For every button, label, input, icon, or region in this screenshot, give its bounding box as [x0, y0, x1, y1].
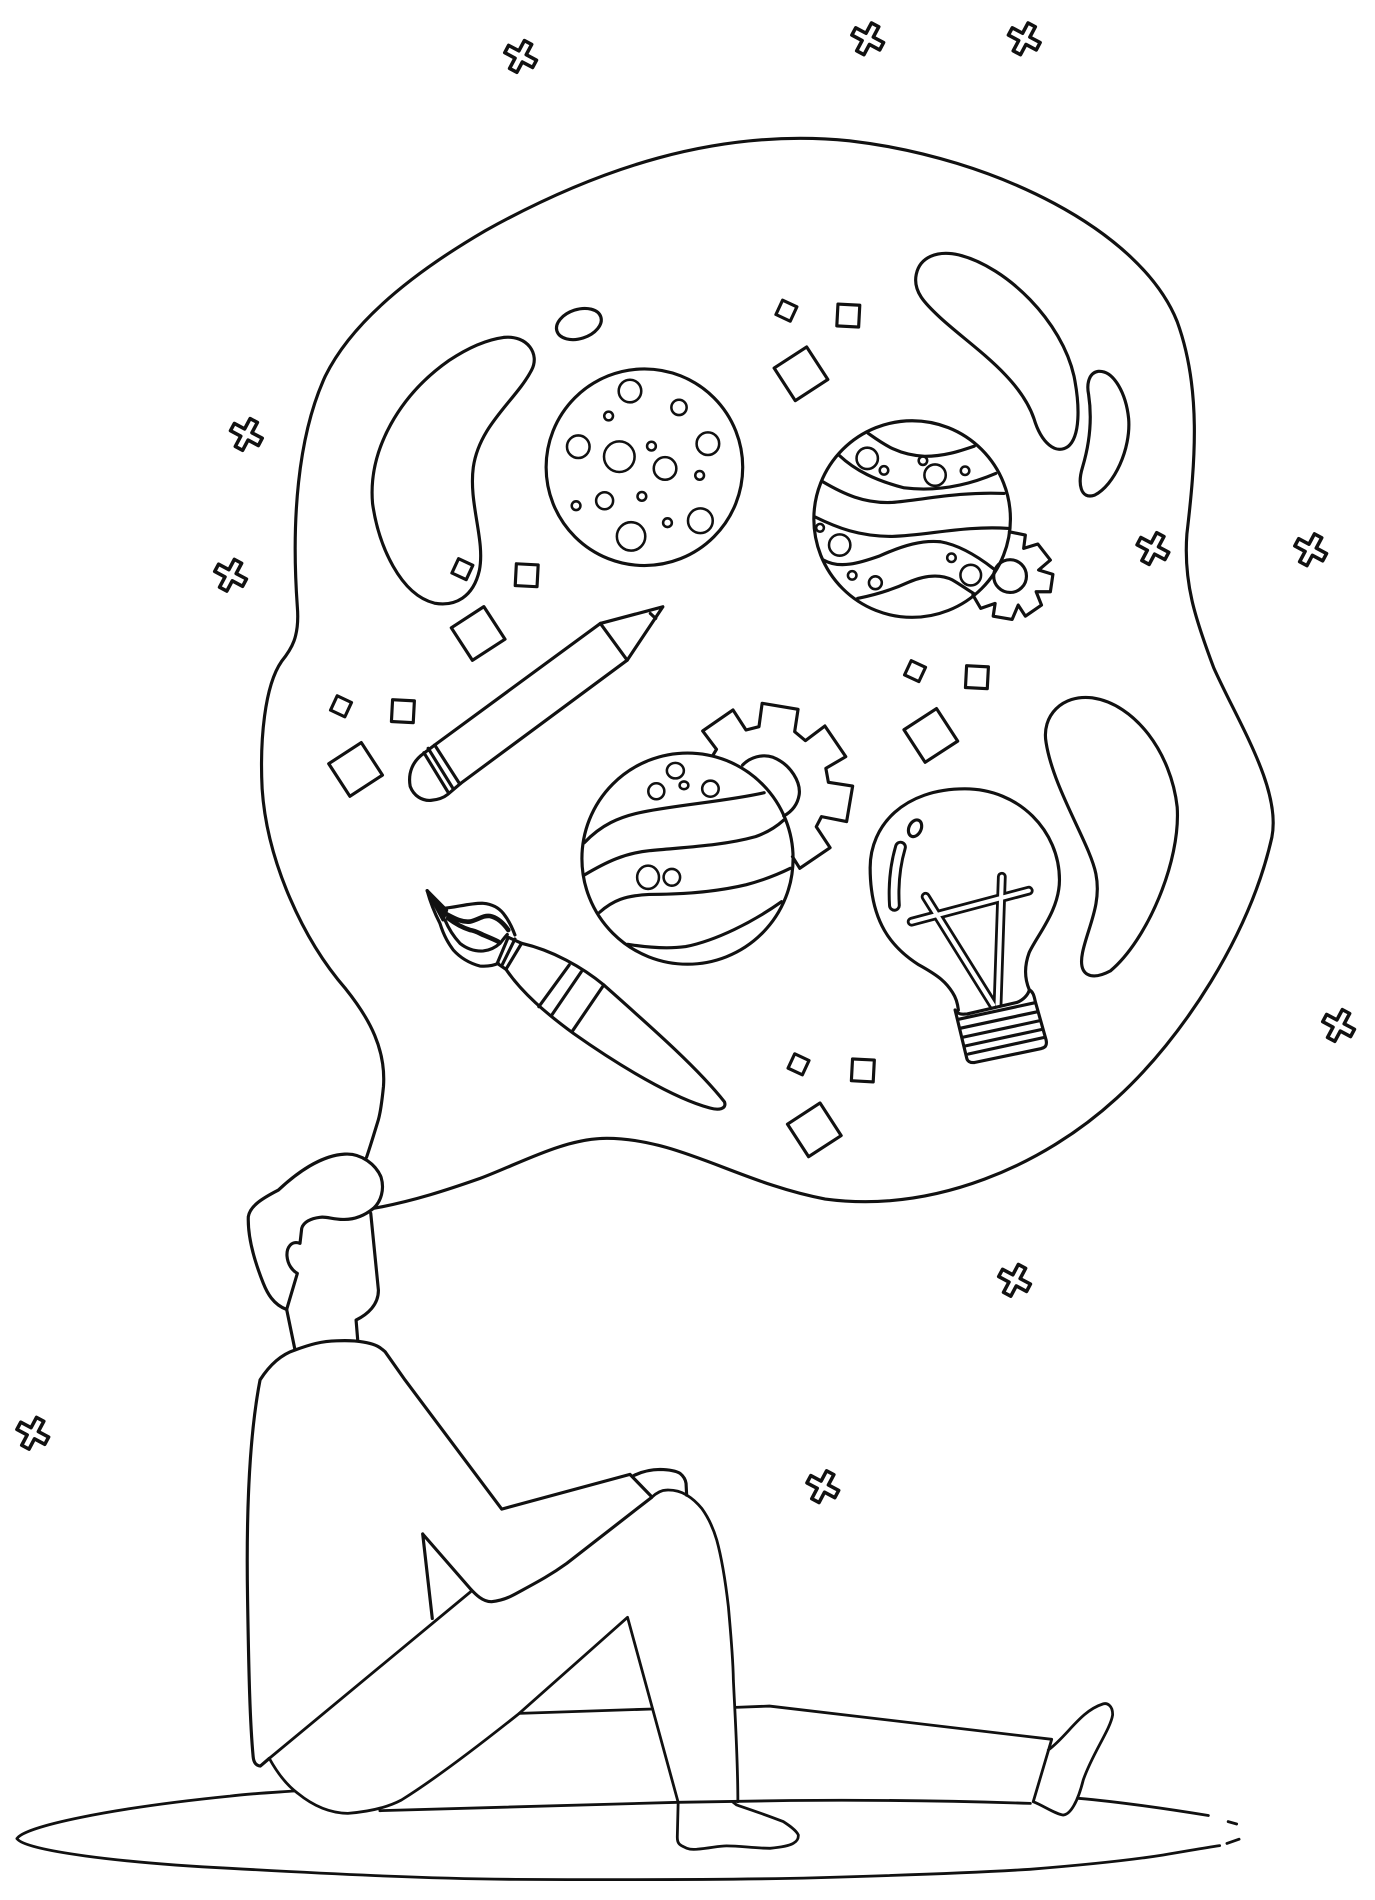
small floating squares — [329, 300, 988, 1157]
hair — [248, 1154, 382, 1309]
thought bubble — [262, 138, 1273, 1208]
icon: light bulb — [870, 789, 1059, 1063]
torso and arm — [247, 1341, 687, 1766]
face and neck — [287, 1213, 378, 1350]
ground ellipse — [17, 1791, 1239, 1880]
decorative blobs inside the bubble — [372, 253, 1177, 976]
icon: paint brush — [427, 891, 725, 1109]
icon: striped planet upper right — [814, 421, 1010, 617]
front leg — [269, 1617, 798, 1849]
front leg upper edge and shin — [269, 1490, 738, 1802]
icon: cratered moon — [546, 369, 743, 566]
back leg and foot — [519, 1704, 1113, 1815]
icon: big gear behind planet — [703, 703, 853, 868]
icon: banded planet center — [582, 753, 793, 964]
icon: pencil — [410, 607, 663, 800]
decorative plus signs — [11, 17, 1360, 1508]
person sitting — [247, 1154, 1113, 1849]
icon: small gear behind striped planet — [973, 532, 1053, 619]
